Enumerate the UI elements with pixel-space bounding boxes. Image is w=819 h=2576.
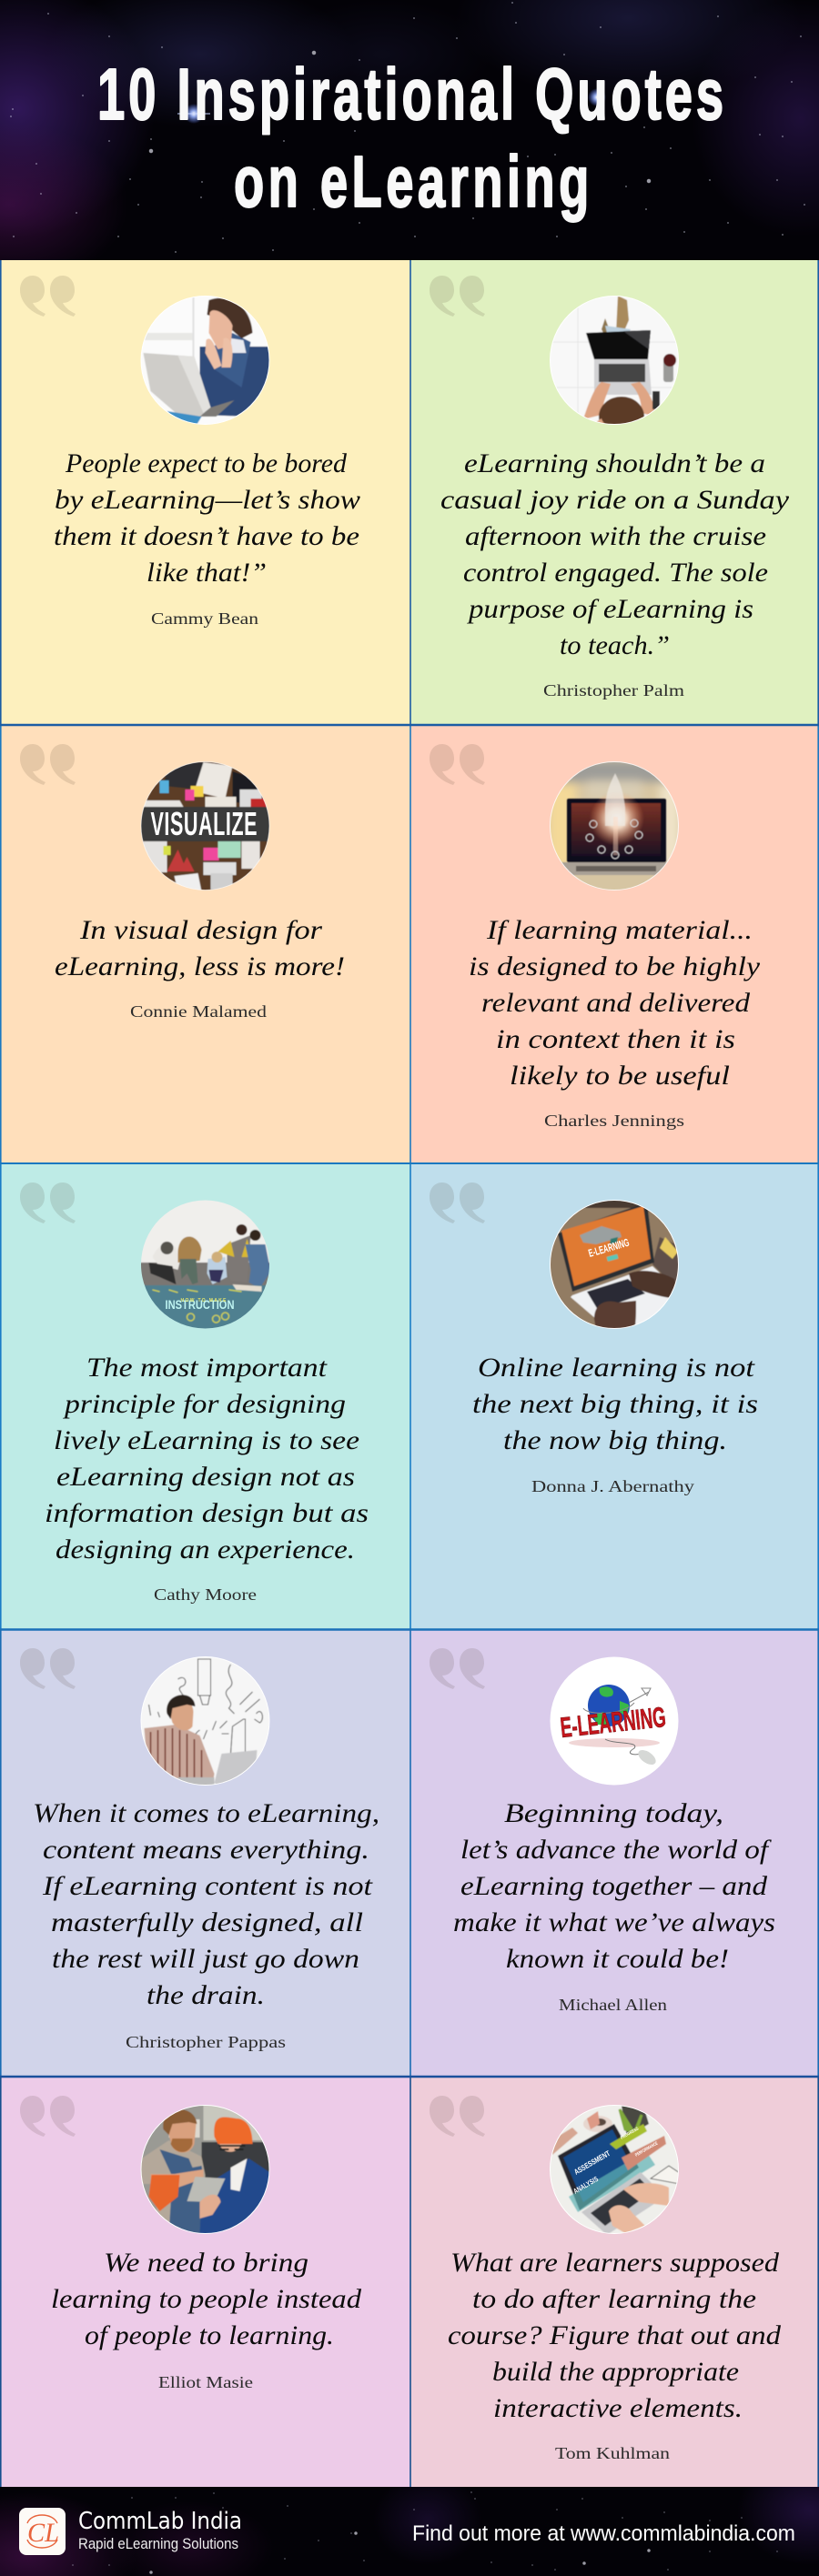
quote text: designing an experience.	[56, 1535, 355, 1565]
quote text: In visual design for	[79, 915, 322, 945]
quote text: The most important	[86, 1353, 328, 1383]
photo: hands on orange e-learning laptop: E-LEARNING	[587, 1236, 631, 1260]
quote text: is designed to be highly	[469, 951, 761, 981]
author: Michael Allen	[559, 1996, 667, 2014]
footer brand name: CommLab India	[78, 2508, 242, 2535]
photo: group planning instruction on floor: INSTRUCTION	[166, 1297, 235, 1312]
photo: group planning instruction on floor: HOW TO MAKE	[180, 1298, 227, 1303]
quote text: in context then it is	[496, 1024, 735, 1054]
photo: laptop with assessment dashboard	[549, 2104, 680, 2235]
photo: group planning instruction on floor	[140, 1199, 271, 1331]
quote mark	[20, 276, 76, 317]
quote text: lively eLearning is to see	[54, 1425, 359, 1455]
quote mark	[20, 1182, 76, 1223]
quote mark	[20, 744, 76, 785]
photo: laptop with assessment dashboard: PROGRESS	[620, 2126, 640, 2141]
photo: man at laptop with idea sketches	[140, 1655, 271, 1786]
quote text: eLearning together – and	[460, 1871, 768, 1901]
quote text: of people to learning.	[85, 2320, 334, 2350]
quote mark	[430, 1182, 485, 1223]
author: Elliot Masie	[158, 2373, 253, 2391]
quote text: information design but as	[45, 1498, 369, 1528]
photo: laptop with rocket	[549, 760, 680, 891]
photo: laptop with assessment dashboard: ANALYSIS	[571, 2175, 600, 2196]
title: on eLearning	[234, 142, 589, 223]
title	[97, 55, 723, 223]
author: Charles Jennings	[544, 1112, 684, 1130]
footer logo: CL	[27, 2518, 59, 2548]
title: 10 Inspirational Quotes	[97, 55, 723, 136]
quote text: course? Figure that out and	[448, 2320, 782, 2350]
author: Christopher Palm	[543, 681, 684, 699]
quote text: Online learning is not	[478, 1353, 755, 1383]
header: starry background	[0, 0, 819, 287]
quote text: If eLearning content is not	[42, 1871, 373, 1901]
panel: Donna J. Abernathy quote	[410, 1164, 819, 1629]
author: Cammy Bean	[151, 609, 258, 628]
panel: Charles Jennings quote	[410, 725, 819, 1163]
quote text: purpose of eLearning is	[467, 594, 753, 624]
photo: visualize desk collage: VISUALIZE	[151, 806, 257, 842]
quote text	[453, 1798, 775, 1974]
quote text: likely to be useful	[510, 1061, 730, 1091]
quote text	[440, 448, 790, 660]
quote text: eLearning shouldn’t be a	[464, 448, 765, 478]
author: Tom Kuhlman	[555, 2444, 670, 2462]
quote mark	[430, 276, 485, 317]
quote text: let’s advance the world of	[460, 1835, 772, 1865]
quote text: like that!”	[147, 558, 267, 588]
photo: laptop with assessment dashboard: ASSESSMENT	[572, 2148, 612, 2177]
panel: Christopher Palm quote	[410, 260, 819, 725]
quote text: What are learners supposed	[450, 2248, 780, 2278]
footer: starry background	[0, 2456, 819, 2576]
quote text: the now big thing.	[503, 1425, 727, 1455]
quote text: relevant and delivered	[481, 988, 751, 1018]
panel: Christopher Pappas quote	[0, 1630, 410, 2077]
author: Cathy Moore	[154, 1585, 257, 1604]
panel: Cathy Moore quote	[0, 1164, 410, 1629]
quote mark	[430, 1648, 485, 1689]
quote text: to do after learning the	[472, 2284, 756, 2314]
quote text: them it doesn’t have to be	[54, 521, 359, 551]
quote text: the rest will just go down	[52, 1944, 359, 1974]
panel: Elliot Masie quote	[0, 2078, 410, 2487]
quote text: People expect to be bored	[65, 448, 348, 478]
quote text: eLearning, less is more!	[55, 951, 345, 981]
photo: globe with e-learning lettering and mouse: E-LEARNING	[559, 1702, 667, 1744]
quote text	[448, 2248, 782, 2423]
author: Connie Malamed	[130, 1002, 267, 1021]
quote text: the drain.	[147, 1980, 265, 2010]
quote text	[54, 448, 360, 588]
quote text: the next big thing, it is	[472, 1389, 758, 1419]
footer logo	[19, 2508, 66, 2555]
quote text	[33, 1798, 379, 2010]
quote text	[469, 915, 761, 1091]
panel: Connie Malamed quote	[0, 725, 410, 1163]
photo: bored woman at laptop	[140, 295, 271, 426]
quote text: by eLearning—let’s show	[55, 485, 360, 515]
quote text: interactive elements.	[493, 2393, 743, 2423]
quote mark	[430, 2096, 485, 2137]
panel: Tom Kuhlman quote	[410, 2078, 819, 2487]
quote text	[51, 2248, 362, 2350]
quote text: control engaged. The sole	[463, 558, 768, 588]
panel: Michael Allen quote	[410, 1630, 819, 2077]
photo: visualize desk collage	[140, 760, 271, 891]
photo: hands on orange e-learning laptop	[549, 1199, 680, 1330]
quote text	[45, 1353, 369, 1565]
quote text: learning to people instead	[51, 2284, 362, 2314]
quote text: Beginning today,	[504, 1798, 723, 1828]
photo: two workers with tablet	[140, 2104, 271, 2235]
quote text	[472, 1353, 758, 1455]
quote text: eLearning design not as	[56, 1462, 355, 1492]
photo: overhead view of woman typing	[550, 296, 679, 425]
quote text: We need to bring	[104, 2248, 308, 2278]
photo: laptop with assessment dashboard: PERFORMANCE	[634, 2140, 660, 2158]
quote text: When it comes to eLearning,	[33, 1798, 379, 1828]
quote text: known it could be!	[506, 1944, 729, 1974]
author: Christopher Pappas	[126, 2033, 286, 2051]
quote text: content means everything.	[43, 1835, 369, 1865]
quote text: to teach.”	[560, 630, 670, 660]
quote mark	[20, 1648, 76, 1689]
quote text: principle for designing	[63, 1389, 346, 1419]
quote mark	[430, 744, 485, 785]
author: Donna J. Abernathy	[531, 1477, 694, 1495]
quote text: casual joy ride on a Sunday	[440, 485, 790, 515]
quote mark	[20, 2096, 76, 2137]
quote text: masterfully designed, all	[51, 1907, 363, 1937]
panel: Cammy Bean quote	[0, 260, 410, 725]
footer call to action: Find out more at www.commlabindia.com	[412, 2521, 795, 2546]
quote text: build the appropriate	[492, 2357, 739, 2387]
quote text: afternoon with the cruise	[465, 521, 766, 551]
quote text	[55, 915, 345, 981]
footer tagline: Rapid eLearning Solutions	[78, 2535, 238, 2552]
quote text: make it what we’ve always	[453, 1907, 775, 1937]
quote text: If learning material...	[486, 915, 753, 945]
photo: globe with e-learning lettering and mouse	[550, 1657, 679, 1785]
